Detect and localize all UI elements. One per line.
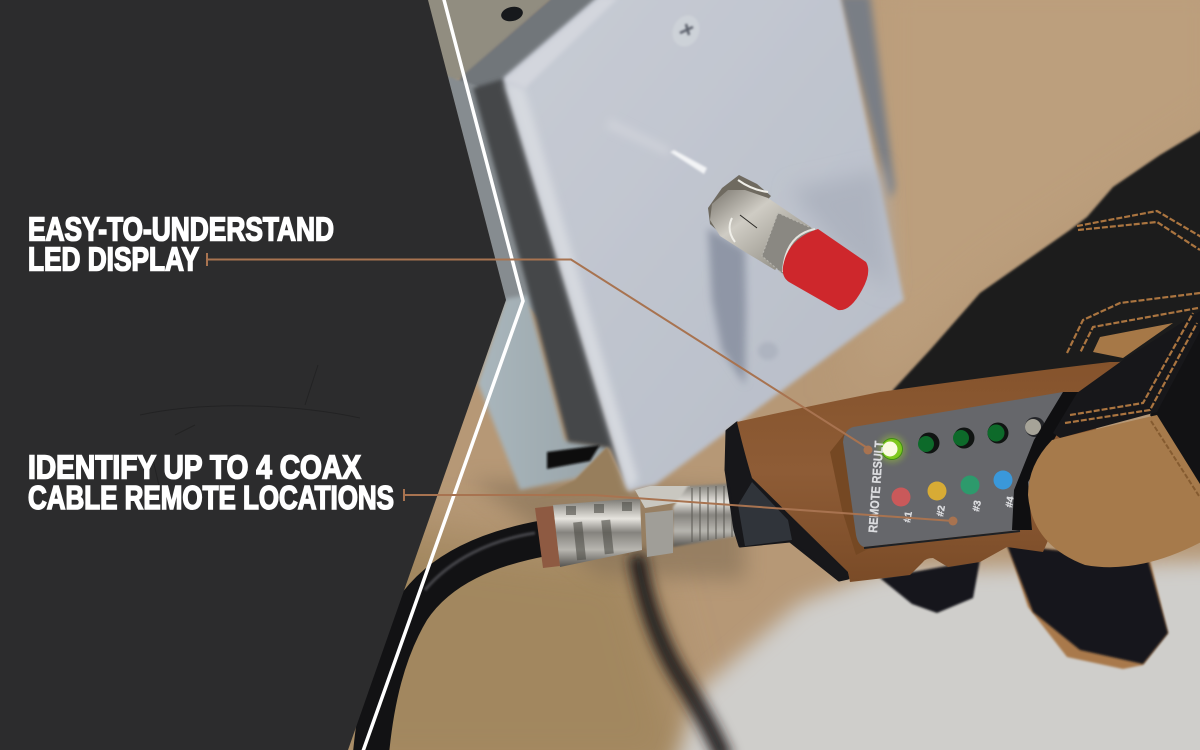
tan gap below plate — [540, 447, 630, 497]
colour key dots — [892, 470, 1012, 506]
white wall plate — [503, 0, 904, 491]
red cap — [783, 229, 868, 310]
crimp barrel — [553, 498, 642, 567]
glove stitching — [1067, 211, 1200, 353]
panel printed labels: REMOTE RESULT — [866, 440, 886, 533]
panel printed labels: #3 — [971, 499, 984, 513]
upper black glove back — [893, 128, 1200, 392]
callout heading: LED display — [28, 210, 334, 278]
threads — [673, 483, 742, 547]
dark channel — [473, 78, 630, 492]
box right flange — [838, 0, 895, 200]
steel bracket — [478, 295, 610, 490]
callout heading: remote locations — [28, 448, 394, 516]
panel printed labels: #2 — [935, 504, 948, 518]
panel printed labels: #4 — [1004, 495, 1017, 509]
dark text panel — [0, 0, 506, 750]
box hole — [500, 5, 524, 23]
LED row — [878, 417, 1045, 463]
callout heading: remote locations: CABLE REMOTE LOCATIONS — [28, 479, 394, 516]
background wall and floor — [330, 0, 1200, 750]
small plate screw hole — [758, 342, 778, 360]
box slot — [547, 445, 600, 469]
tester display panel — [843, 392, 1063, 547]
metal junction box — [425, 0, 895, 497]
callout heading: LED display: EASY-TO-UNDERSTAND — [28, 210, 334, 248]
callout heading: LED display: LED DISPLAY — [28, 240, 199, 278]
panel printed labels: #1 — [902, 510, 915, 524]
plate highlight — [670, 150, 707, 174]
tan suede thumb — [1028, 415, 1200, 567]
callout heading: remote locations: IDENTIFY UP TO 4 COAX — [28, 448, 361, 486]
orange ferrule — [535, 506, 560, 568]
leader line to LED display — [207, 253, 872, 454]
photo: coax tester in gloved hand at a wall plate — [330, 0, 1200, 750]
leader line to colour key — [404, 489, 958, 526]
black knit cuff at right — [1150, 318, 1200, 495]
callout: remote locations — [28, 448, 958, 526]
black sliver between panel and thumb — [1012, 392, 1080, 530]
connector shadow — [708, 228, 746, 385]
lower glove fingers — [880, 545, 1168, 669]
strap — [1053, 308, 1200, 438]
tester black nose — [726, 423, 848, 580]
white chevron outline — [362, 0, 523, 750]
coax cable with F connector — [370, 483, 742, 750]
plate screw — [668, 11, 704, 51]
blurred cable on floor — [637, 555, 725, 750]
wall coax connector with red cap — [708, 175, 868, 310]
tan palm patch — [1093, 323, 1173, 358]
gloved thumb and strap — [1012, 308, 1200, 567]
hex nut — [645, 510, 673, 557]
callout: LED display — [28, 210, 872, 454]
panel printed labels — [866, 440, 1017, 533]
tester brown housing — [737, 362, 1125, 582]
upper hex nut — [635, 486, 692, 508]
tester body — [726, 362, 1125, 582]
